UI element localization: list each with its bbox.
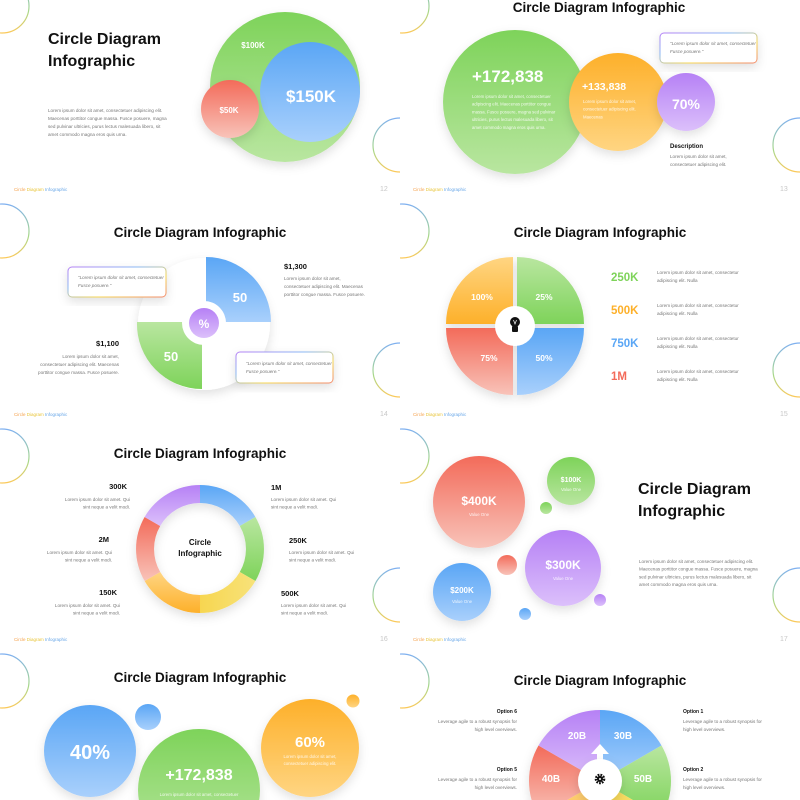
description: Description	[670, 144, 703, 150]
circle: blue 40%	[44, 704, 161, 797]
legend list: adipiscing elit. Nulla	[657, 311, 698, 316]
pie chart: 50	[164, 349, 178, 364]
legend list: 750K	[611, 338, 639, 350]
right labels: sint neque a velit modi.	[289, 558, 336, 563]
options right: high level overviews.	[683, 785, 725, 790]
text: $1,300	[284, 262, 365, 297]
pie chart: 50	[233, 290, 247, 305]
title: Circle Diagram Infographic	[514, 225, 687, 240]
text block: Lorem ipsum dolor sit amet, consectetuer adipiscing elit.	[48, 108, 162, 113]
options right: Option 1	[683, 709, 703, 715]
title: Circle Diagram Infographic	[114, 670, 287, 685]
wheel chart: 50B	[634, 774, 652, 785]
title: Circle Diagram Infographic	[114, 446, 287, 461]
callout box: "Lorem ipsum dolor sit amet, consectetuer	[670, 41, 756, 46]
title: Infographic	[48, 53, 135, 70]
circle: green: +172,838	[165, 767, 233, 784]
text: $1,100	[38, 339, 120, 375]
panel: slide 14: 14	[380, 411, 388, 418]
bubbles: Value One	[561, 487, 582, 492]
right labels: Lorem ipsum dolor sit amet. Qui	[271, 497, 336, 502]
donut center label: Infographic	[178, 549, 222, 558]
circle: orange: Lorem ipsum dolor sit amet,	[583, 99, 636, 104]
options right: Option 2	[683, 767, 703, 773]
description: Lorem ipsum dolor sit amet,	[670, 154, 727, 159]
footer: Circle Diagram Infographic	[413, 412, 467, 417]
right labels: Lorem ipsum dolor sit amet. Qui	[281, 603, 346, 608]
donut chart	[136, 485, 264, 613]
legend list: 250K	[611, 272, 639, 284]
title: Circle Diagram	[48, 31, 161, 48]
bubbles: $300K	[545, 558, 581, 572]
pie chart: %	[199, 317, 210, 331]
options left: high level overviews.	[475, 785, 517, 790]
description: consectetuer adipiscing elit.	[670, 162, 726, 167]
legend list: adipiscing elit. Nulla	[657, 377, 698, 382]
pie labels: 75%	[480, 353, 498, 363]
right labels: sint neque a velit modi.	[281, 611, 328, 616]
text: $1,100: Lorem ipsum dolor sit amet,	[62, 354, 119, 359]
panel: slide 17: 17	[780, 636, 788, 643]
legend list: 500K	[611, 305, 639, 317]
callout box 2	[236, 352, 333, 383]
circle: green	[138, 729, 260, 800]
options left: high level overviews.	[475, 727, 517, 732]
circle: blue 40%: 40%	[70, 742, 110, 764]
left labels: Lorem ipsum dolor sit amet. Qui	[55, 603, 120, 608]
text: $1,300: consectetuer adipiscing elit. Maecenas	[284, 284, 364, 289]
right labels: 250K	[289, 536, 308, 545]
text: $1,300: $1,300	[284, 262, 307, 271]
circle: green: +172,838	[472, 67, 543, 86]
callout box 1: Fusce posuere."	[78, 283, 112, 288]
legend list: Lorem ipsum dolor sit amet, consectetur	[657, 336, 739, 341]
circle: green: amet commodo magna eros quis urna.	[472, 125, 546, 130]
left labels: Lorem ipsum dolor sit amet. Qui	[47, 550, 112, 555]
callout box	[660, 33, 757, 63]
bubbles: $200K	[450, 586, 474, 595]
title: Circle Diagram Infographic	[114, 225, 287, 240]
callout box 1: "Lorem ipsum dolor sit amet, consectetuer	[78, 275, 164, 280]
bubbles: $100K	[561, 477, 581, 484]
bubbles	[433, 456, 606, 621]
circle: green: adipiscing elit. Maecenas porttitor congue	[472, 102, 552, 107]
bubbles: Value One	[553, 576, 574, 581]
text: $1,300: porttitor congue massa. Fusce posuere.	[284, 292, 365, 297]
options left: Leverage agile to a robust synopsis for	[438, 719, 517, 724]
footer: Circle Diagram Infographic	[14, 637, 68, 642]
circle chart: nested circles	[201, 12, 360, 162]
wheel chart: 40B	[542, 774, 560, 785]
panel: slide 12: 12	[380, 186, 388, 193]
circle: green: ultricies, purus lectus malesuada libero, sit	[472, 117, 554, 122]
pie labels: 25%	[535, 292, 553, 302]
panel: slide 16	[14, 446, 388, 643]
arrow	[591, 744, 609, 760]
pie labels: 50%	[535, 353, 553, 363]
callout box: Fusce posuere."	[670, 49, 704, 54]
options right	[683, 709, 762, 790]
left labels: sint neque a velit modi.	[65, 558, 112, 563]
circle: orange 60%: 60%	[295, 734, 325, 751]
circle: green: massa. Fusce posuere, magna sed pulvinar	[472, 109, 556, 114]
panel: slide 13	[413, 0, 788, 193]
right labels	[271, 483, 354, 616]
left labels: 300K	[109, 482, 128, 491]
options right: Leverage agile to a robust synopsis for	[683, 719, 762, 724]
right labels: 1M	[271, 483, 281, 492]
circle: orange	[569, 53, 667, 151]
panel: slide 15: 15	[780, 411, 788, 418]
wheel chart	[529, 710, 671, 800]
legend list: Lorem ipsum dolor sit amet, consectetur	[657, 270, 739, 275]
left labels: Lorem ipsum dolor sit amet. Qui	[65, 497, 130, 502]
panel: slide 12	[14, 12, 388, 193]
circle: orange: Maecenas	[583, 114, 603, 119]
callout box 2: Fusce posuere."	[246, 369, 280, 374]
left labels: sint neque a velit modi.	[83, 505, 130, 510]
circle: purple: 70%	[672, 96, 701, 112]
circle: green: Lorem ipsum dolor sit amet, consectetuer	[160, 792, 239, 797]
legend list: adipiscing elit. Nulla	[657, 278, 698, 283]
legend list: 1M	[611, 371, 627, 383]
panel: slide 17	[413, 456, 788, 643]
panel: slide 16: 16	[380, 636, 388, 643]
circle: green: Lorem ipsum dolor sit amet, consectetuer	[472, 94, 551, 99]
options left: Option 5	[497, 767, 517, 773]
text block: amet commodo magna eros quis urna.	[639, 582, 718, 587]
panel: slide 14	[14, 225, 388, 418]
title: Circle Diagram Infographic	[514, 673, 687, 688]
options left: Option 6	[497, 709, 517, 715]
options right: high level overviews.	[683, 727, 725, 732]
circle chart: nested circles: $100K	[241, 41, 265, 50]
text block: sed pulvinar ultricies, purus lectus malesuada libero, sit	[48, 124, 161, 129]
panel: slide 15	[413, 225, 788, 418]
legend list: Lorem ipsum dolor sit amet, consectetur	[657, 303, 739, 308]
title: Circle Diagram	[638, 481, 751, 498]
text block: Maecenas porttitor congue massa. Fusce posuere, magna	[48, 116, 167, 121]
icon: light bulb	[510, 317, 520, 332]
pie chart	[137, 257, 271, 390]
panel: slide 13: 13	[780, 186, 788, 193]
right labels: sint neque a velit modi.	[271, 505, 318, 510]
callout box 1	[68, 267, 166, 297]
footer: Circle Diagram Infographic	[413, 187, 467, 192]
options right: Leverage agile to a robust synopsis for	[683, 777, 762, 782]
footer: Circle Diagram Infographic	[14, 187, 68, 192]
text: $1,100: $1,100	[96, 339, 119, 348]
circle: green	[443, 30, 587, 174]
left labels: 150K	[99, 588, 118, 597]
circle chart: nested circles: $50K	[219, 106, 239, 115]
left labels: 2M	[99, 535, 109, 544]
text block: sed pulvinar ultricies, purus lectus malesuada libero, sit	[639, 574, 752, 579]
footer: Circle Diagram Infographic	[14, 412, 68, 417]
circle: purple	[657, 73, 715, 131]
legend list: Lorem ipsum dolor sit amet, consectetur	[657, 369, 739, 374]
options left: Leverage agile to a robust synopsis for	[438, 777, 517, 782]
bubbles: Value One	[469, 512, 490, 517]
panel: slide 18	[44, 670, 360, 800]
options left	[438, 709, 517, 790]
title: Infographic	[638, 503, 725, 520]
circle: orange 60%: consectetuer adipiscing elit.	[284, 761, 336, 766]
circle: orange: +133,838	[582, 81, 626, 93]
wheel chart: 30B	[614, 731, 632, 742]
circle: orange: consectetuer adipiscing elit.	[583, 107, 636, 112]
quadrant pie	[446, 257, 584, 395]
description	[670, 144, 727, 167]
bubbles: $400K	[461, 494, 497, 508]
left labels: sint neque a velit modi.	[73, 611, 120, 616]
legend list: adipiscing elit. Nulla	[657, 344, 698, 349]
bubbles: Value One	[452, 599, 473, 604]
right labels: 500K	[281, 589, 300, 598]
circle chart: nested circles: $150K	[286, 87, 337, 106]
pie labels	[471, 292, 553, 363]
text block: Maecenas porttitor congue massa. Fusce posuere, magna	[639, 567, 758, 572]
circle: orange 60%	[261, 694, 360, 797]
text: $1,100: consectetuer adipiscing elit. Maecenas	[40, 362, 120, 367]
text: $1,300: Lorem ipsum dolor sit amet,	[284, 276, 341, 281]
panel: slide 19	[438, 673, 762, 800]
title: Circle Diagram Infographic	[513, 0, 686, 15]
callout box 2: "Lorem ipsum dolor sit amet, consectetuer	[246, 361, 332, 366]
donut center label: Circle	[189, 538, 211, 547]
left labels	[47, 482, 130, 616]
wheel chart: 20B	[568, 731, 586, 742]
footer: Circle Diagram Infographic	[413, 637, 467, 642]
text block: Lorem ipsum dolor sit amet, consectetuer adipiscing elit.	[639, 559, 753, 564]
text: $1,100: porttitor congue massa. Fusce posuere.	[38, 370, 119, 375]
icon: gear	[596, 775, 604, 783]
circle: orange 60%: Lorem ipsum dolor sit amet,	[283, 754, 337, 759]
legend list	[611, 270, 739, 383]
text block: amet commodo magna eros quis urna.	[48, 132, 127, 137]
pie labels: 100%	[471, 292, 493, 302]
right labels: Lorem ipsum dolor sit amet. Qui	[289, 550, 354, 555]
